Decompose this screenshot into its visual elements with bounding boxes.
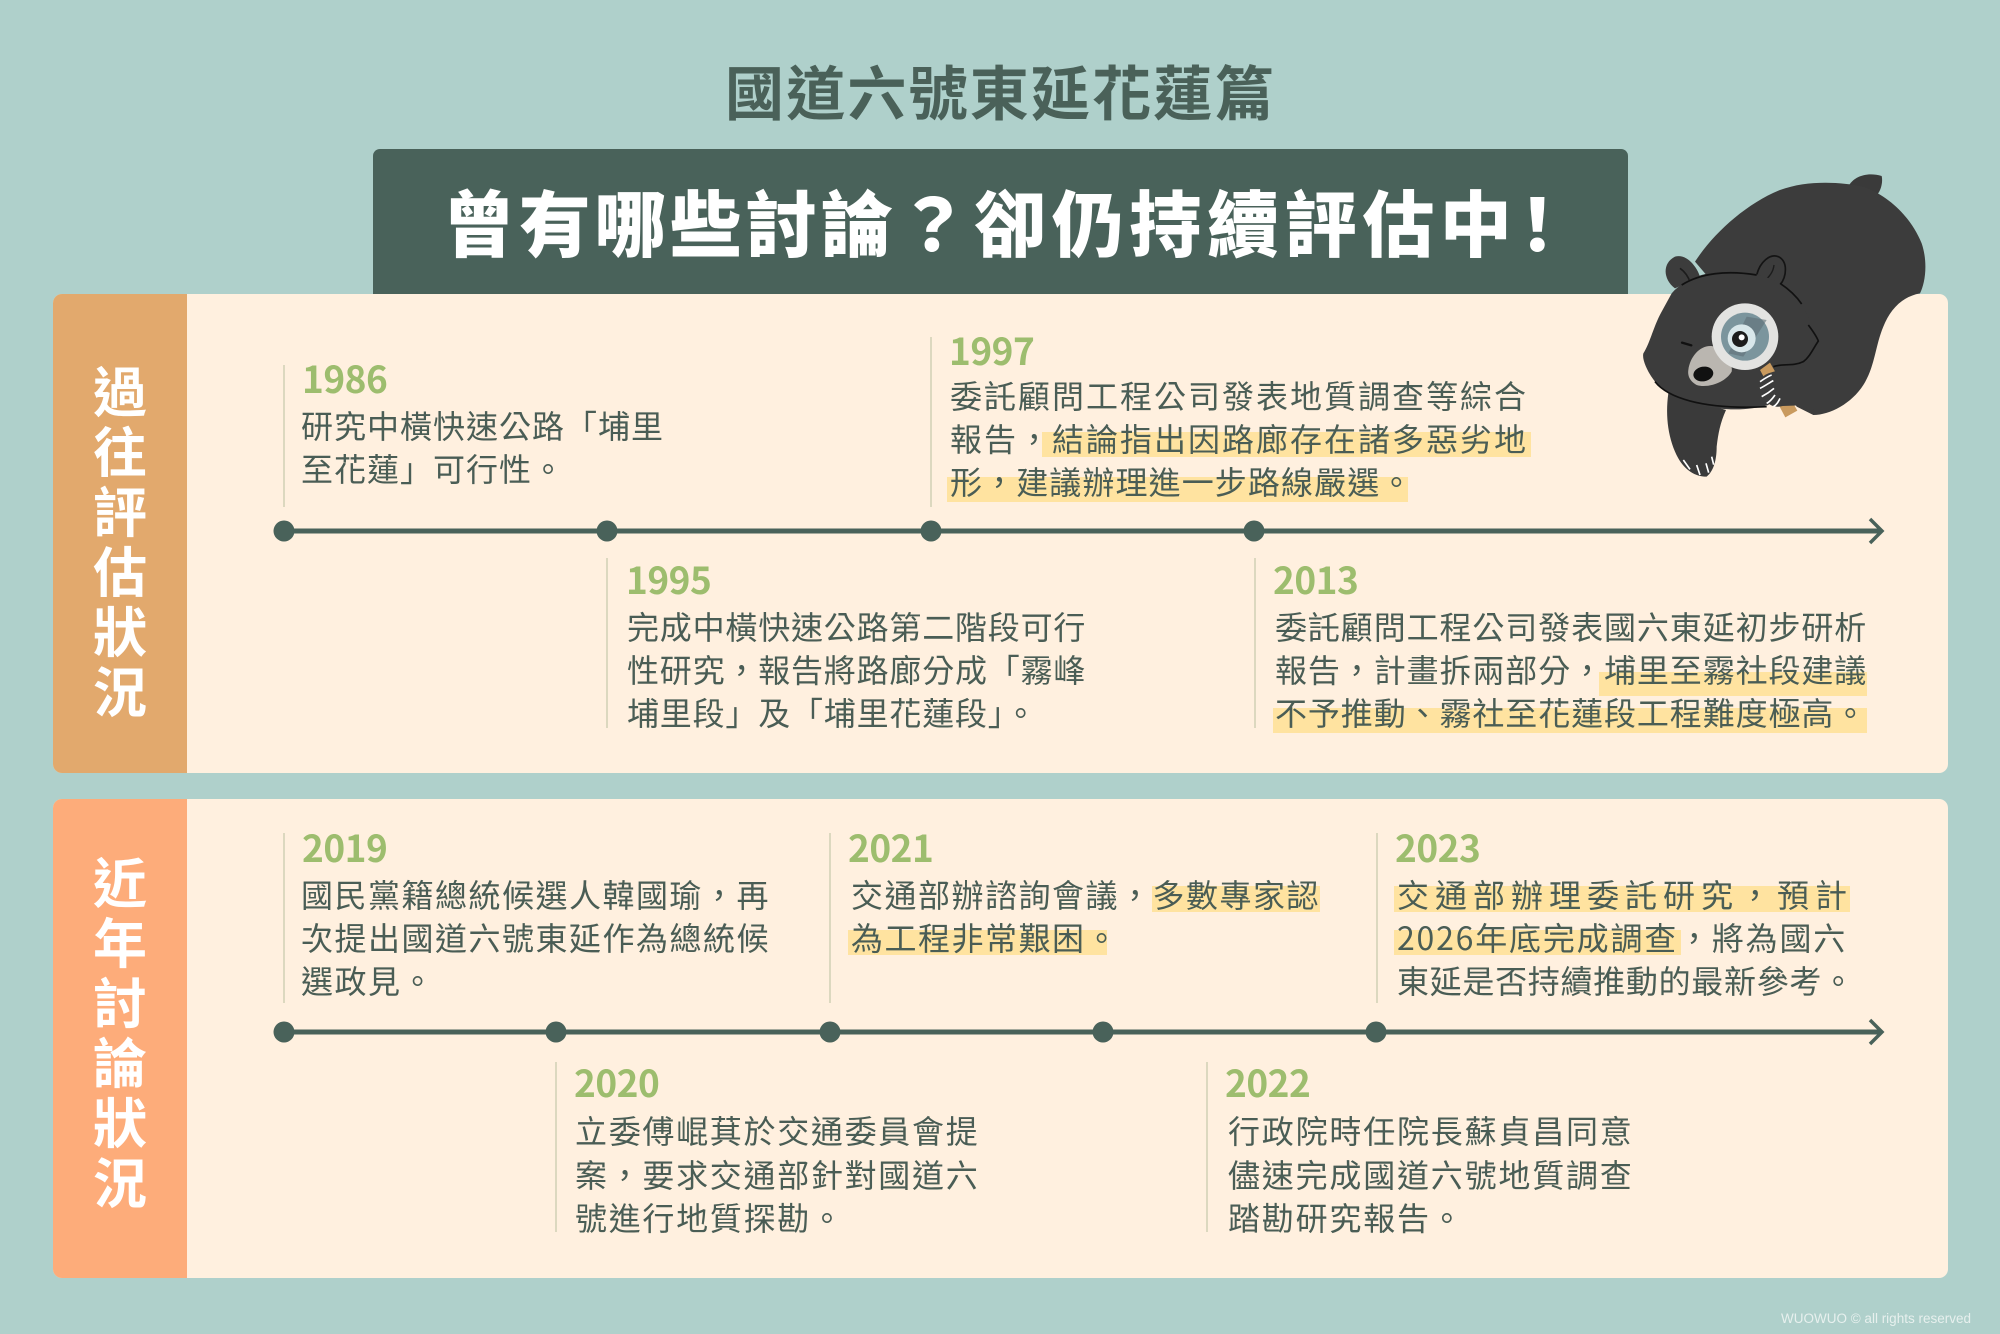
magnifying glass [1712,303,1778,370]
paw gripping handle [1759,363,1833,412]
side tab label: 過 [93,349,147,428]
event: 2023: 東延是否持續推動的最新參考。 [1397,957,1855,1003]
event: 1995: 1995 [626,551,711,605]
event: 2022: 踏勘研究報告。 [1228,1194,1465,1240]
event: 1986 [283,365,683,507]
event: 1995: 性研究，報告將路廊分成「霧峰 [627,646,1086,692]
event: 2020 [555,1062,1015,1232]
side tab label: 論 [93,1020,147,1099]
event: 2023 [1376,833,1876,1003]
icon: black bear with magnifying glass [1643,174,1926,477]
side tab: recent discussions [53,799,187,1278]
event: 2020: 號進行地質探勘。 [575,1194,845,1240]
event: 2021: 2021 [848,819,933,873]
event: 1997: 委託顧問工程公司發表地質調查等綜合 [950,372,1528,418]
event: 1986: 1986 [302,350,387,404]
left ear [1666,256,1700,288]
event: 2013 [1254,558,1884,728]
event: 2013: 不予推動、霧社至花蓮段工程難度極高。 [1275,689,1867,735]
side tab label: 往 [93,409,147,488]
footer credit: WUOWUO © all rights reserved [1781,1311,1971,1326]
event: 2020: 2020 [574,1054,659,1108]
event: 1995 [606,558,1106,728]
event: 2019: 國民黨籍總統候選人韓國瑜，再 [301,871,770,917]
side tab label [93,349,147,728]
side tab label: 評 [93,469,147,548]
event: 2022 [1206,1062,1666,1232]
event: 1997: 報告，結論指出因路廊存在諸多惡劣地 [950,415,1528,461]
event: 2021: 交通部辦諮詢會議，多數專家認 [851,871,1320,917]
side tab label: 估 [93,529,147,608]
series title: 國道六號東延花蓮篇 [725,47,1276,132]
event: 2022: 2022 [1225,1054,1310,1108]
paw claws [1760,375,1780,407]
event: 2019: 2019 [302,819,387,873]
event: 2020: 立委傅崐萁於交通委員會提 [575,1107,979,1153]
event: 1986: 研究中橫快速公路「埔里 [301,402,664,448]
panel: recent discussions [53,799,1948,1278]
panel: past assessments [53,294,1948,773]
tail [1848,174,1882,197]
closed eye [1682,343,1691,345]
event: 2013: 委託顧問工程公司發表國六東延初步研析 [1275,603,1867,649]
event: 2019: 選政見。 [301,957,435,1003]
event: 2020: 案，要求交通部針對國道六 [575,1151,979,1197]
side tab label: 狀 [93,1080,147,1159]
muzzle [1688,346,1732,386]
event: 2019 [283,833,783,1003]
event: 1997: 形，建議辦理進一步路線嚴選。 [950,458,1413,504]
timeline: recent discussions [274,1018,1884,1046]
event: 2021 [829,833,1329,1003]
timeline: past assessments [274,518,1884,544]
event: 2022: 行政院時任院長蘇貞昌同意 [1228,1107,1634,1153]
side tab label: 狀 [93,589,147,668]
event: 2019: 次提出國道六號東延作為總統候 [301,914,770,960]
side tab label: 況 [93,1140,147,1219]
event: 1997: 1997 [949,322,1034,376]
event: 2022: 儘速完成國道六號地質調查 [1228,1151,1634,1197]
event: 2013: 報告，計畫拆兩部分，埔里至霧社段建議 [1275,646,1867,692]
event: 2023: 2026年底完成調查，將為國六 [1397,914,1847,960]
event: 1995: 完成中橫快速公路第二階段可行 [627,603,1086,649]
hanging arm [1667,393,1726,477]
side tab label [93,840,147,1219]
event: 2013: 2013 [1273,551,1358,605]
side tab label: 討 [93,960,147,1039]
head outline strokes [1655,273,1818,407]
nose [1692,365,1714,383]
head [1643,271,1818,409]
side tab label: 近 [93,840,147,919]
event: 2023: 交通部辦理委託研究，預計 [1397,871,1853,917]
main title banner [373,149,1628,299]
handle of magnifying glass [1760,363,1797,417]
event: 1997 [930,337,1550,507]
side tab label: 年 [93,900,147,979]
side tab label: 況 [93,649,147,728]
event: 2021: 為工程非常艱困。 [851,914,1119,960]
right ear [1757,256,1785,285]
event: 1995: 埔里段」及「埔里花蓮段」。 [627,689,1037,735]
main title banner: 曾有哪些討論？卻仍持續評估中！ [443,167,1577,272]
side tab: past assessments [53,294,187,773]
body [1695,183,1925,415]
event: 2023: 2023 [1395,819,1480,873]
event: 1986: 至花蓮」可行性。 [301,445,565,491]
